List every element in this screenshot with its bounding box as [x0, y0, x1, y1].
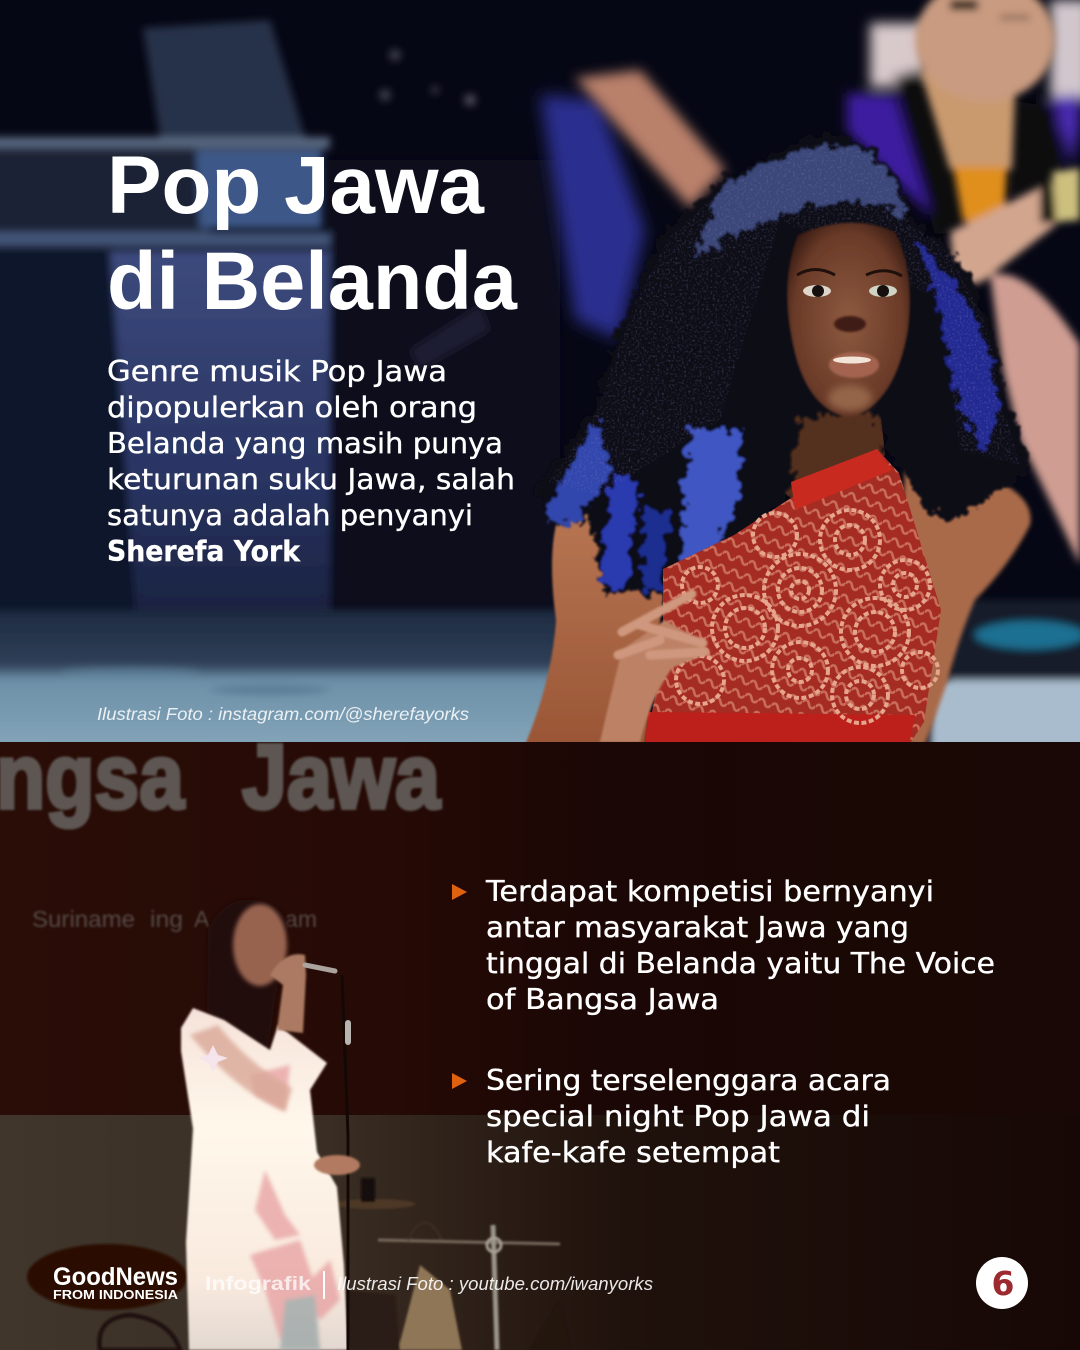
arm and hand on microphone — [270, 954, 306, 1033]
bullet text one: of Bangsa Jawa — [486, 983, 719, 1016]
icon: bullet arrow one — [452, 884, 467, 900]
stage floor — [0, 600, 1080, 755]
banner subtitle in the photo: ing — [150, 906, 183, 932]
singer body — [525, 135, 1031, 745]
intro paragraph — [107, 355, 515, 568]
microphone stand — [342, 975, 351, 1350]
logo: GoodNews from Indonesia: FROM INDONESIA — [53, 1287, 179, 1302]
intro paragraph: dipopulerkan oleh orang — [107, 391, 477, 424]
bullet text two: Sering terselenggara acara — [486, 1064, 891, 1097]
bullet text two: special night Pop Jawa di — [486, 1100, 870, 1133]
stage equipment in the background — [0, 20, 560, 620]
bullet text one: antar masyarakat Jawa yang — [486, 911, 909, 944]
page number badge — [976, 1257, 1028, 1309]
face — [233, 904, 287, 986]
page number badge: 6 — [992, 1264, 1014, 1303]
dress — [181, 1008, 348, 1350]
intro paragraph: Belanda yang masih punya — [107, 427, 503, 460]
photo credit: top: Ilustrasi Foto : instagram.com/@sherefayorks — [97, 704, 469, 724]
eyes — [797, 270, 902, 297]
bullet text one: Terdapat kompetisi bernyanyi — [485, 875, 934, 908]
bullet text one: tinggal di Belanda yaitu The Voice — [486, 947, 995, 980]
intro paragraph: keturunan suku Jawa, salah — [107, 463, 515, 496]
logo: GoodNews from Indonesia: GoodNews — [53, 1263, 178, 1291]
banner text in the photo — [0, 742, 444, 831]
banner subtitle in the photo — [32, 906, 317, 932]
banner text in the photo: Jawa — [242, 726, 441, 828]
intro paragraph: Sherefa York — [107, 535, 301, 568]
category label: Infografik — [205, 1274, 312, 1295]
hair — [207, 920, 290, 928]
bullet text two — [486, 1064, 891, 1169]
banner text in the photo: ngsa — [0, 726, 185, 828]
panel: top photo of Sherefa York on stage — [0, 0, 1080, 755]
lace top — [645, 449, 941, 745]
right shoulder and arm — [890, 470, 1031, 745]
nose and mouth — [828, 316, 879, 411]
dress pattern — [250, 1065, 340, 1350]
neck — [784, 410, 885, 498]
hair — [538, 135, 1030, 594]
banner subtitle in the photo: A — [194, 906, 210, 932]
title: di Belanda — [107, 236, 518, 327]
translucent sleeve — [190, 1025, 292, 1112]
icon: bullet arrow two — [452, 1073, 467, 1089]
logo: GoodNews from Indonesia — [53, 1263, 179, 1302]
left arm — [524, 512, 663, 742]
panel: bottom photo of singer on stage — [0, 742, 739, 1350]
title: Pop Jawa — [107, 140, 485, 231]
banner subtitle in the photo: Suriname — [32, 906, 135, 932]
microphone — [305, 965, 335, 971]
hand — [600, 594, 705, 742]
photo credit: bottom: Ilustrasi Foto : youtube.com/iwanyorks — [337, 1274, 653, 1294]
bullet text one — [485, 875, 995, 1016]
lower hand — [314, 1155, 360, 1175]
sleeve star — [198, 1045, 228, 1072]
intro paragraph: Genre musik Pop Jawa — [107, 355, 447, 388]
banner subtitle in the photo: am — [285, 906, 317, 932]
intro paragraph: satunya adalah penyanyi — [107, 499, 473, 532]
bullet text two: kafe-kafe setempat — [486, 1136, 780, 1169]
title — [107, 140, 518, 327]
background performers — [540, 0, 1080, 565]
singer in white dress — [181, 900, 360, 1350]
drum kit — [27, 1178, 570, 1350]
face — [787, 223, 910, 418]
